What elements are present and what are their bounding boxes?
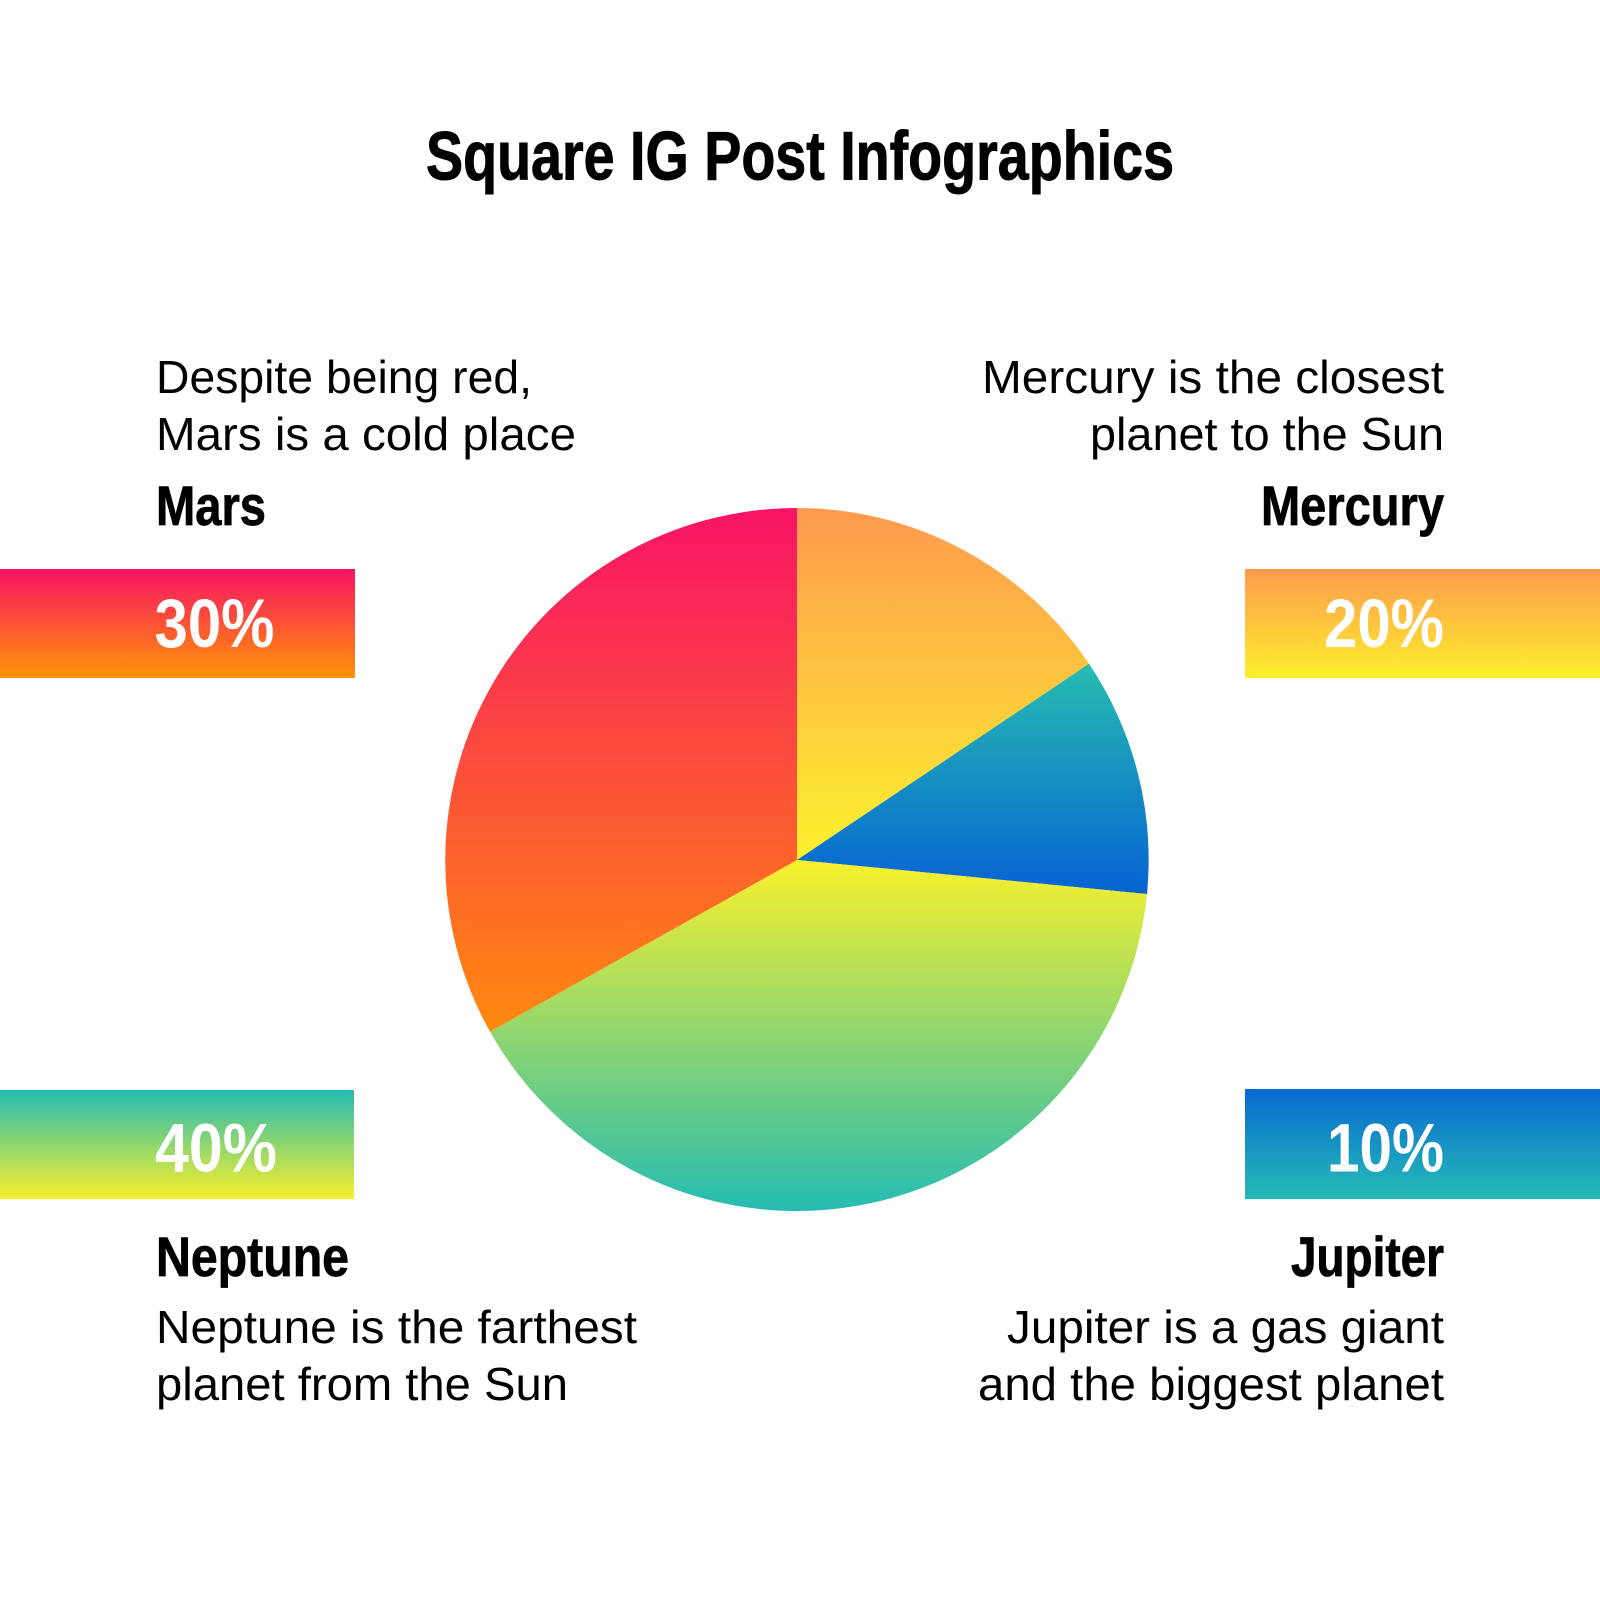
pie slice: Jupiter [797,664,1149,894]
pie chart [445,508,1149,1211]
panel: Jupiter [978,1089,1600,1410]
Jupiter percentage bar [1245,1089,1600,1199]
Mars heading: Mars [156,474,266,537]
Mercury description [982,351,1444,460]
Neptune description: Neptune is the farthest [156,1301,637,1353]
Mars description [156,351,576,460]
Mercury heading: Mercury [1261,474,1444,537]
pie slice: Mercury [797,508,1089,860]
Neptune percentage: 40% [155,1110,277,1186]
Mars percentage: 30% [154,585,274,662]
Jupiter description: and the biggest planet [978,1358,1444,1410]
panel: Mars [0,351,576,678]
Mars description: Mars is a cold place [156,408,576,460]
panel: Mercury [982,351,1600,678]
Mercury percentage: 20% [1324,585,1444,662]
Jupiter description [978,1301,1444,1410]
Jupiter percentage: 10% [1327,1110,1444,1186]
Mercury percentage bar [1245,569,1600,678]
Jupiter description: Jupiter is a gas giant [1007,1301,1444,1353]
Mercury description: Mercury is the closest [982,351,1444,403]
Mars percentage bar [0,569,355,678]
Jupiter heading: Jupiter [1291,1225,1444,1288]
Neptune percentage bar [0,1090,354,1199]
title: Square IG Post Infographics [426,118,1174,194]
panel: Neptune [0,1090,637,1410]
pie slice: Mars [445,508,797,1032]
Neptune heading: Neptune [156,1225,349,1288]
Mars description: Despite being red, [156,351,532,403]
Neptune description [156,1301,637,1410]
pie slice: Neptune [490,860,1147,1211]
Neptune description: planet from the Sun [156,1358,568,1410]
Mercury description: planet to the Sun [1090,408,1444,460]
